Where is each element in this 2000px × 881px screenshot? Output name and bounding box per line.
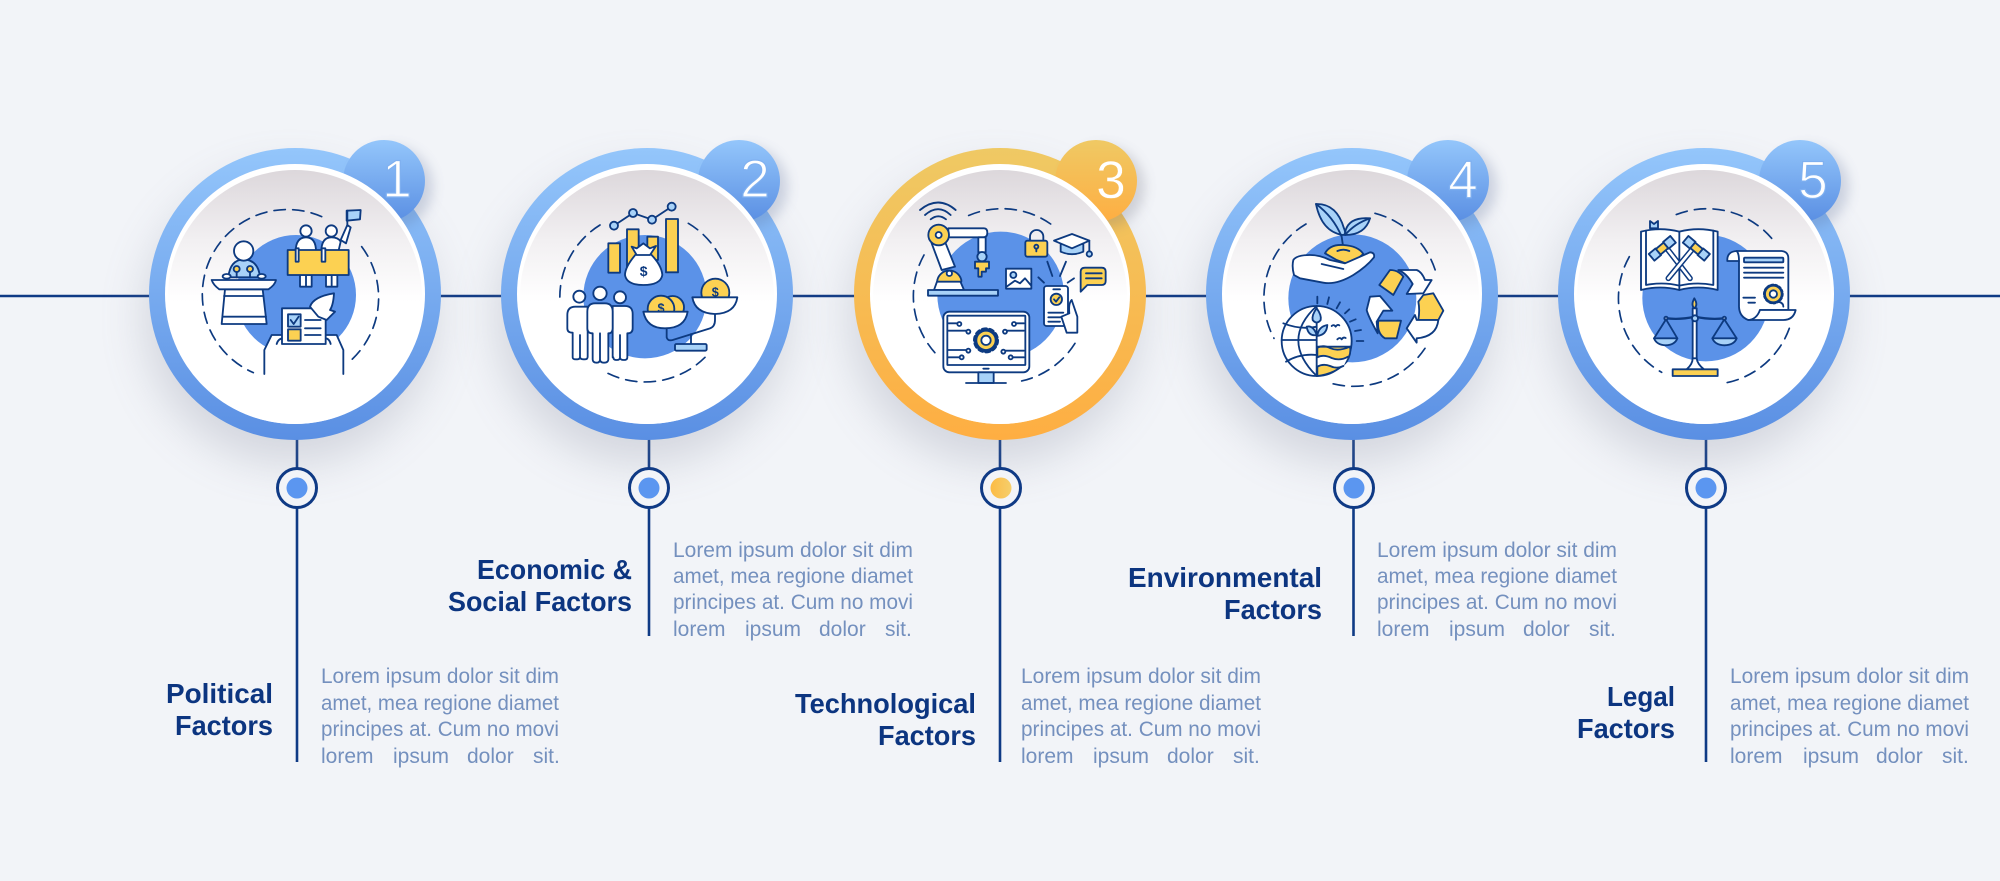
number 3: 3 xyxy=(1096,151,1126,210)
text block 4: sit. xyxy=(1589,618,1616,641)
ring 4 xyxy=(1201,148,1498,464)
heading: environmental factors xyxy=(1128,562,1322,625)
text block 1: amet, mea regione diamet xyxy=(321,692,559,715)
connector line 5 xyxy=(1705,430,1707,762)
ring 2 xyxy=(496,148,793,464)
badge 5 xyxy=(1759,140,1849,228)
number 1: 1 xyxy=(382,150,412,209)
ring 3 xyxy=(849,148,1146,464)
text block 2: principes at. Cum no movi xyxy=(673,591,913,614)
text block 1: ipsum xyxy=(393,745,449,768)
heading: economic and social factors xyxy=(448,554,632,617)
text block 3: amet, mea regione diamet xyxy=(1021,692,1261,715)
text block 1: lorem xyxy=(321,745,374,768)
text block 5: sit. xyxy=(1942,745,1969,768)
timeline horizontal line xyxy=(0,295,2000,297)
ring 5 xyxy=(1553,148,1850,464)
text block 4: amet, mea regione diamet xyxy=(1377,565,1617,588)
text block 1: principes at. Cum no movi xyxy=(321,718,559,741)
heading: environmental factors: Factors xyxy=(1224,594,1322,625)
text block 5: principes at. Cum no movi xyxy=(1730,718,1969,741)
text block 2 xyxy=(673,539,913,641)
text block 1: sit. xyxy=(533,745,560,768)
panel: political factors xyxy=(144,140,560,768)
icon: politics xyxy=(202,209,379,374)
text block 3 xyxy=(1021,665,1261,768)
heading: economic and social factors: Social Factors xyxy=(448,586,632,617)
text block 2: ipsum xyxy=(745,618,801,641)
icon: environment xyxy=(1264,204,1443,386)
node 2 xyxy=(630,468,668,508)
heading: environmental factors: Environmental xyxy=(1128,562,1322,593)
number 4: 4 xyxy=(1448,151,1478,210)
node 5 xyxy=(1686,468,1726,508)
icon: economy: $ xyxy=(640,263,648,279)
number 2: 2 xyxy=(740,150,770,209)
heading: legal factors: Factors xyxy=(1577,713,1675,744)
heading: political factors xyxy=(166,678,273,741)
text block 5: dolor xyxy=(1876,745,1923,768)
panel: technological factors xyxy=(795,140,1261,768)
text block 2: sit. xyxy=(885,618,912,641)
badge 2 xyxy=(698,140,788,228)
text block 2: lorem xyxy=(673,618,726,641)
connector line 4 xyxy=(1352,430,1355,636)
inner disc 5 xyxy=(1574,164,1834,424)
text block 3: dolor xyxy=(1167,745,1214,768)
node 3 xyxy=(982,468,1020,508)
node 1 xyxy=(278,468,316,508)
heading: technological factors: Factors xyxy=(878,720,976,751)
badge 4 xyxy=(1407,140,1497,228)
inner disc 1 xyxy=(165,164,425,424)
panel: economic and social factors xyxy=(448,140,913,641)
heading: political factors: Factors xyxy=(175,710,273,741)
text block 5: lorem xyxy=(1730,745,1783,768)
text block 3: ipsum xyxy=(1093,745,1149,768)
text block 4: Lorem ipsum dolor sit dim xyxy=(1377,539,1617,562)
text block 1 xyxy=(321,665,560,768)
heading: economic and social factors: Economic & xyxy=(477,554,632,585)
text block 3: principes at. Cum no movi xyxy=(1021,718,1261,741)
text block 3: Lorem ipsum dolor sit dim xyxy=(1021,665,1261,688)
icon: economy xyxy=(560,203,737,382)
heading: political factors: Political xyxy=(166,678,273,709)
icon: technology xyxy=(913,202,1106,383)
icon: law xyxy=(1618,209,1796,383)
ring 1 xyxy=(144,148,441,464)
text block 4: ipsum xyxy=(1449,618,1505,641)
icon: economy: $ xyxy=(657,302,665,316)
text block 5: amet, mea regione diamet xyxy=(1730,692,1969,715)
badge 3 xyxy=(1055,140,1145,228)
text block 1: dolor xyxy=(467,745,514,768)
text block 4: dolor xyxy=(1523,618,1570,641)
text block 4: lorem xyxy=(1377,618,1430,641)
heading: technological factors xyxy=(795,688,976,751)
text block 4 xyxy=(1377,539,1617,641)
inner disc 4 xyxy=(1222,164,1482,424)
connector line 1 xyxy=(296,430,298,762)
connector line 3 xyxy=(999,430,1001,762)
text block 5: Lorem ipsum dolor sit dim xyxy=(1730,665,1969,688)
text block 5: ipsum xyxy=(1803,745,1859,768)
text block 2: Lorem ipsum dolor sit dim xyxy=(673,539,913,562)
badge 1 xyxy=(343,140,433,228)
panel: legal factors xyxy=(1553,140,1969,768)
text block 1: Lorem ipsum dolor sit dim xyxy=(321,665,559,688)
heading: legal factors xyxy=(1577,681,1675,744)
text block 5 xyxy=(1730,665,1969,768)
text block 2: amet, mea regione diamet xyxy=(673,565,913,588)
inner disc 3 xyxy=(870,164,1130,424)
text block 2: dolor xyxy=(819,618,866,641)
heading: legal factors: Legal xyxy=(1607,681,1675,712)
text block 4: principes at. Cum no movi xyxy=(1377,591,1617,614)
number 5: 5 xyxy=(1798,151,1828,210)
panel: environmental factors xyxy=(1128,140,1617,641)
node 4 xyxy=(1334,468,1374,508)
icon: economy: $ xyxy=(712,286,719,300)
text block 3: lorem xyxy=(1021,745,1074,768)
connector line 2 xyxy=(648,430,650,636)
heading: technological factors: Technological xyxy=(795,688,976,719)
text block 3: sit. xyxy=(1233,745,1260,768)
inner disc 2 xyxy=(517,164,777,424)
